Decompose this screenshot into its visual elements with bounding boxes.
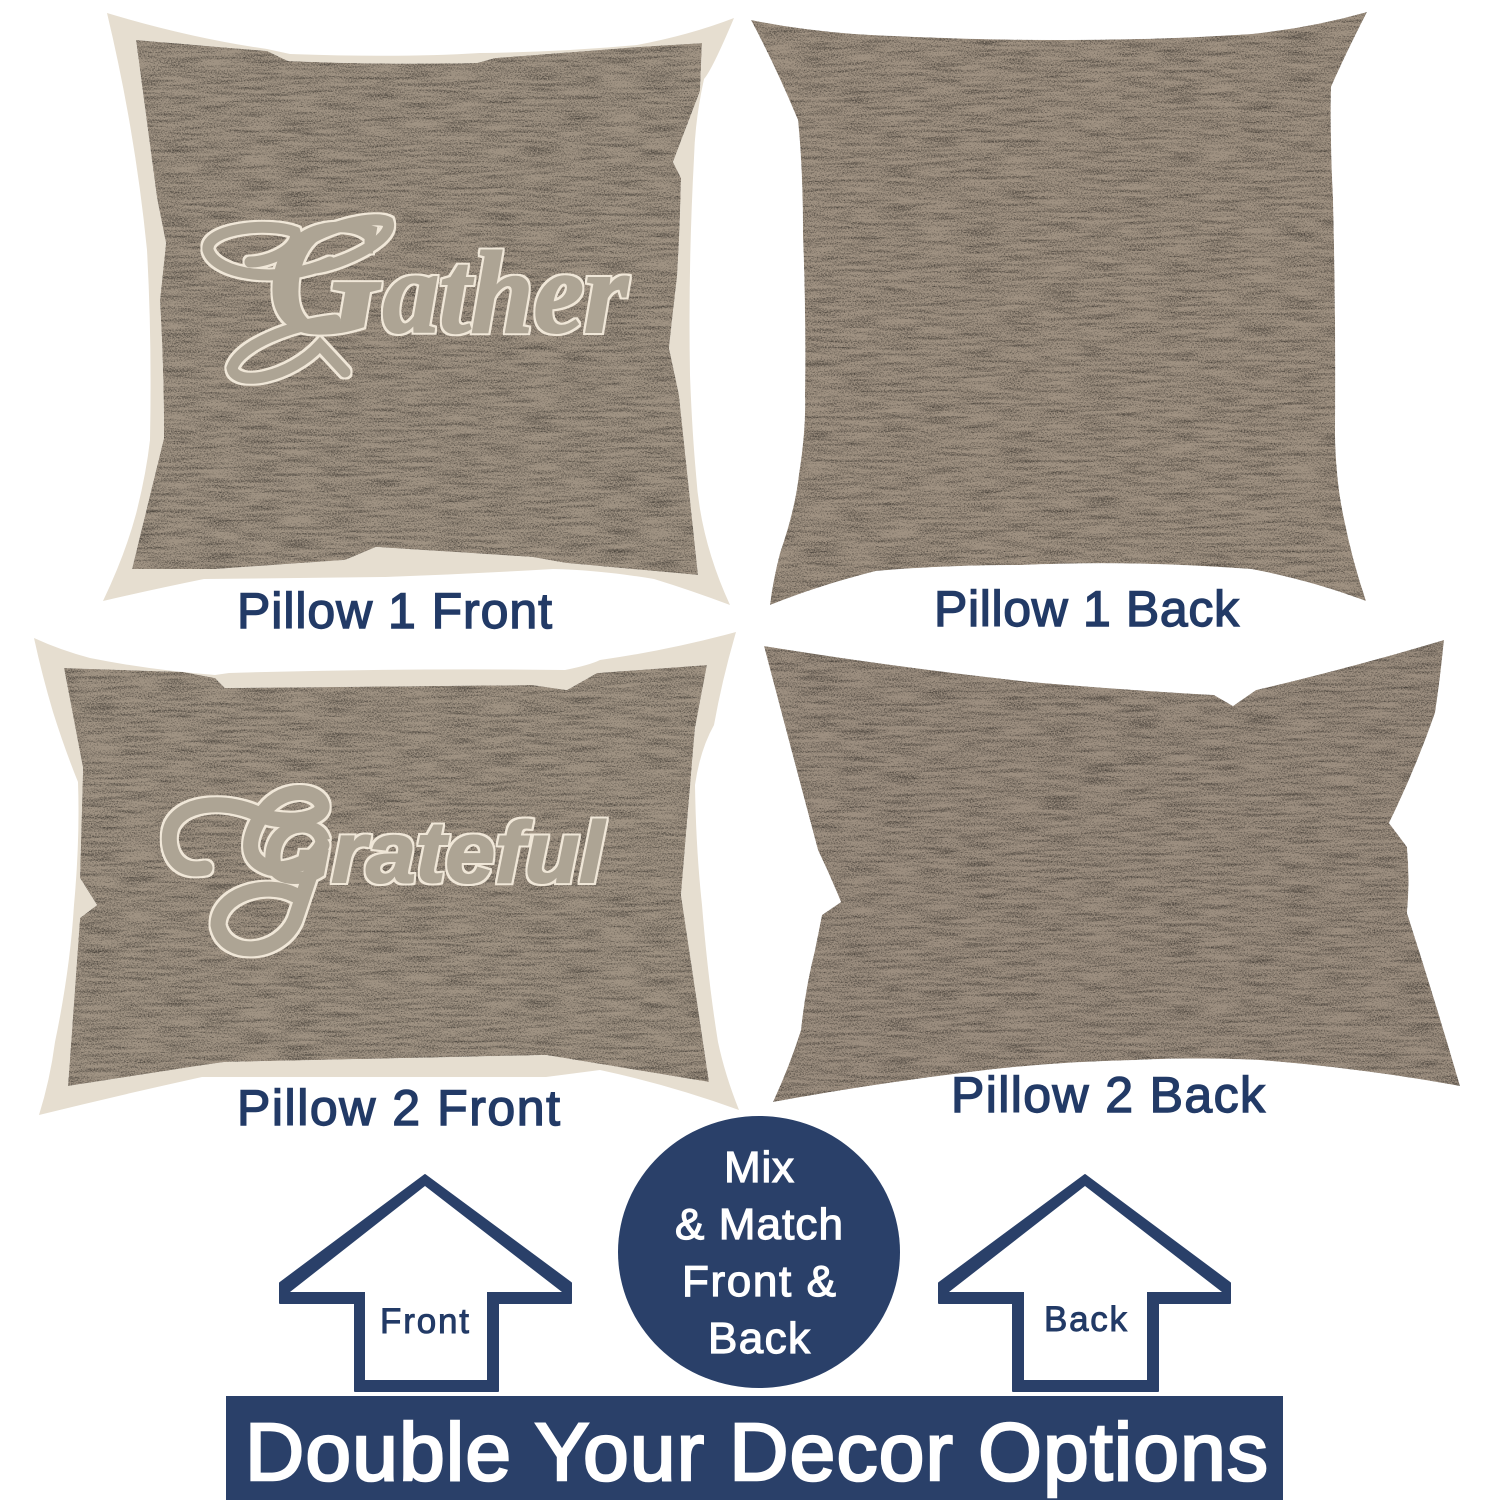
panel: pillow 2 back xyxy=(764,640,1460,1102)
label: pillow 2 front: Pillow 2 Front xyxy=(237,1080,560,1136)
pillow 1 front cream border xyxy=(103,13,734,605)
banner: double your decor options: Double Your Decor Options xyxy=(245,1407,1268,1498)
arrow text: front: Front xyxy=(380,1302,469,1341)
Gather stitched word: Gather xyxy=(268,185,629,368)
callout: mix and match circle: Front & xyxy=(682,1257,836,1306)
arrow: back xyxy=(939,1175,1230,1391)
arrow text: back: Back xyxy=(1044,1300,1128,1339)
Grateful stitched word: Grateful xyxy=(262,805,606,901)
Grateful stitched word xyxy=(169,792,606,949)
label: pillow 2 back: Pillow 2 Back xyxy=(951,1067,1266,1123)
pillow 1 front fabric xyxy=(132,40,702,575)
label: pillow 1 back: Pillow 1 Back xyxy=(934,581,1240,637)
arrow: front xyxy=(280,1175,571,1391)
callout: mix and match circle xyxy=(618,1116,900,1388)
label: pillow 1 front: Pillow 1 Front xyxy=(237,583,552,639)
callout: mix and match circle: & Match xyxy=(675,1200,843,1249)
panel: pillow 2 front xyxy=(34,632,739,1115)
pillow 2 front cream border xyxy=(34,632,739,1115)
callout: mix and match circle: Mix xyxy=(724,1143,794,1192)
pillow 2 front fabric xyxy=(64,665,709,1086)
panel: pillow 1 back xyxy=(751,12,1367,605)
callout: mix and match circle: Back xyxy=(708,1314,811,1363)
panel: pillow 1 front xyxy=(103,13,734,605)
